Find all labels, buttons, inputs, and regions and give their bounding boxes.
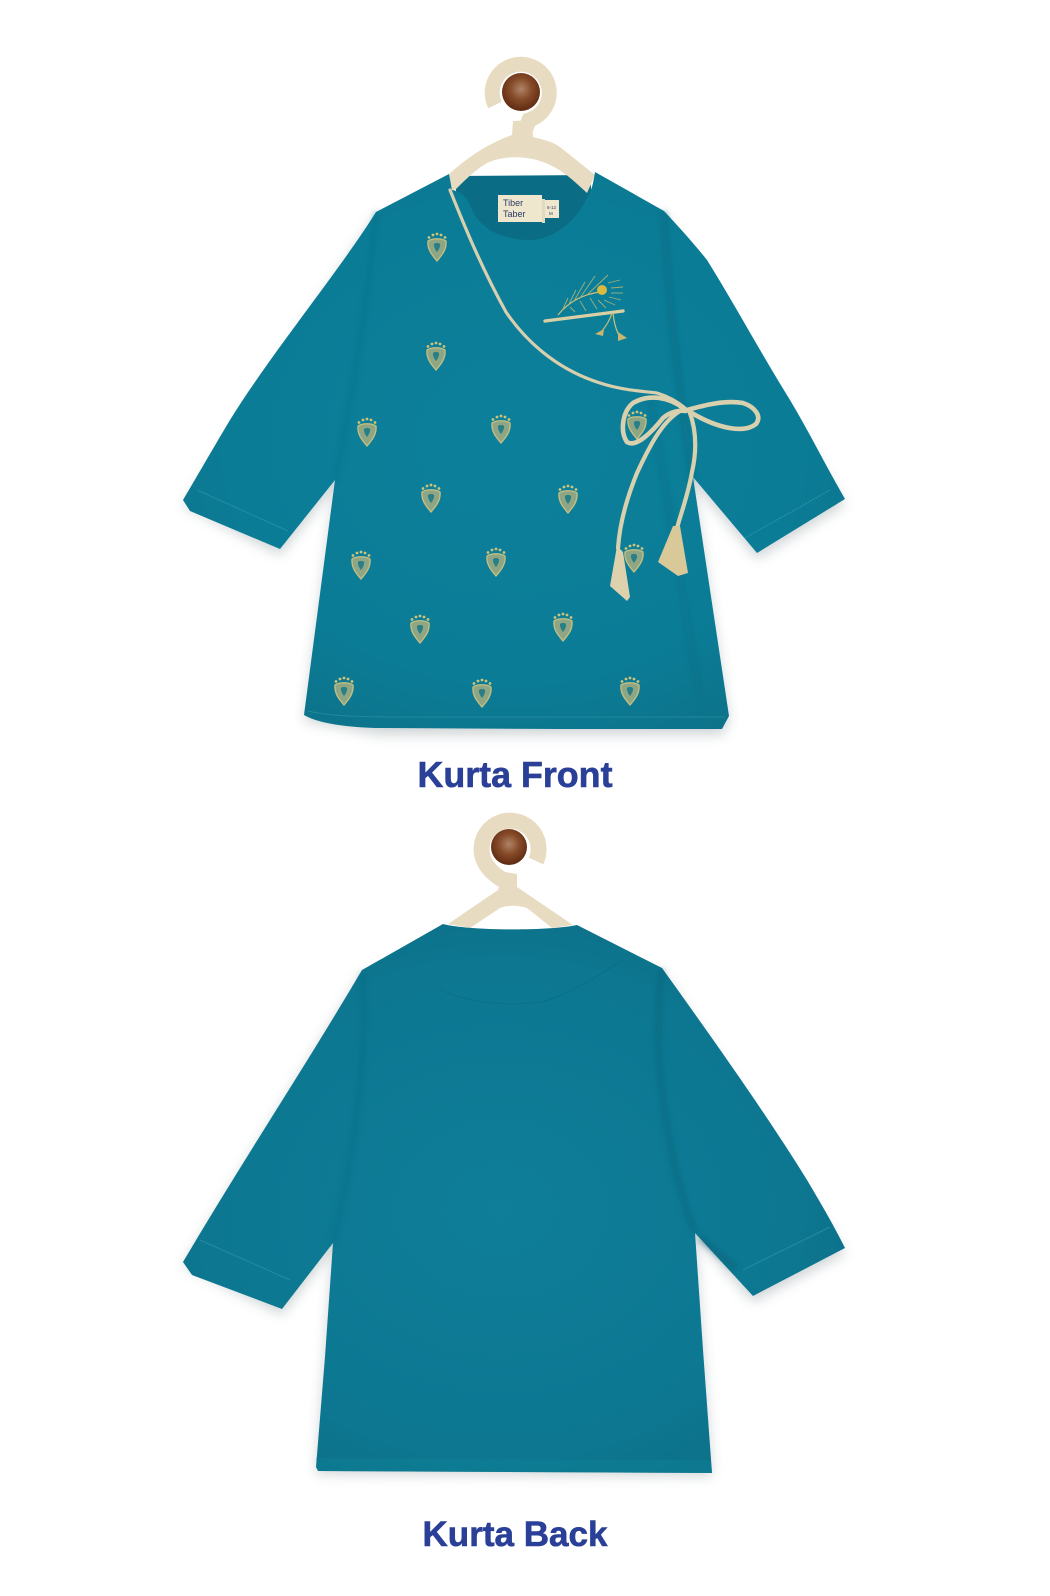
panel: kurta back <box>183 821 845 1554</box>
garment label: 6-12 <box>547 205 557 210</box>
heading: kurta front: Kurta Front <box>418 754 613 795</box>
garment label: M <box>549 211 553 216</box>
kurta front body and sleeves <box>183 172 845 729</box>
rope tassels <box>610 526 688 601</box>
panel: kurta front <box>183 64 845 795</box>
sleeve and fold shading <box>197 212 830 717</box>
garment label: Taber <box>503 209 526 219</box>
embroidered feather and flute <box>545 275 627 341</box>
garment label <box>498 195 559 223</box>
heading: kurta back: Kurta Back <box>422 1515 608 1554</box>
icon: wooden hanger, front <box>448 64 595 193</box>
white gap above inner neck <box>440 150 600 176</box>
peacock feather motifs <box>335 233 646 707</box>
garment label: Tiber <box>503 198 523 208</box>
kurta back body and sleeves <box>183 924 845 1473</box>
soft shadow under kurta front <box>183 216 845 735</box>
inner back neck of front kurta <box>456 175 592 243</box>
soft shadow under kurta back <box>183 972 845 1476</box>
icon: wooden hanger, back <box>448 821 573 928</box>
back shading and seams <box>200 960 830 1473</box>
rope closure and bow <box>450 190 758 548</box>
